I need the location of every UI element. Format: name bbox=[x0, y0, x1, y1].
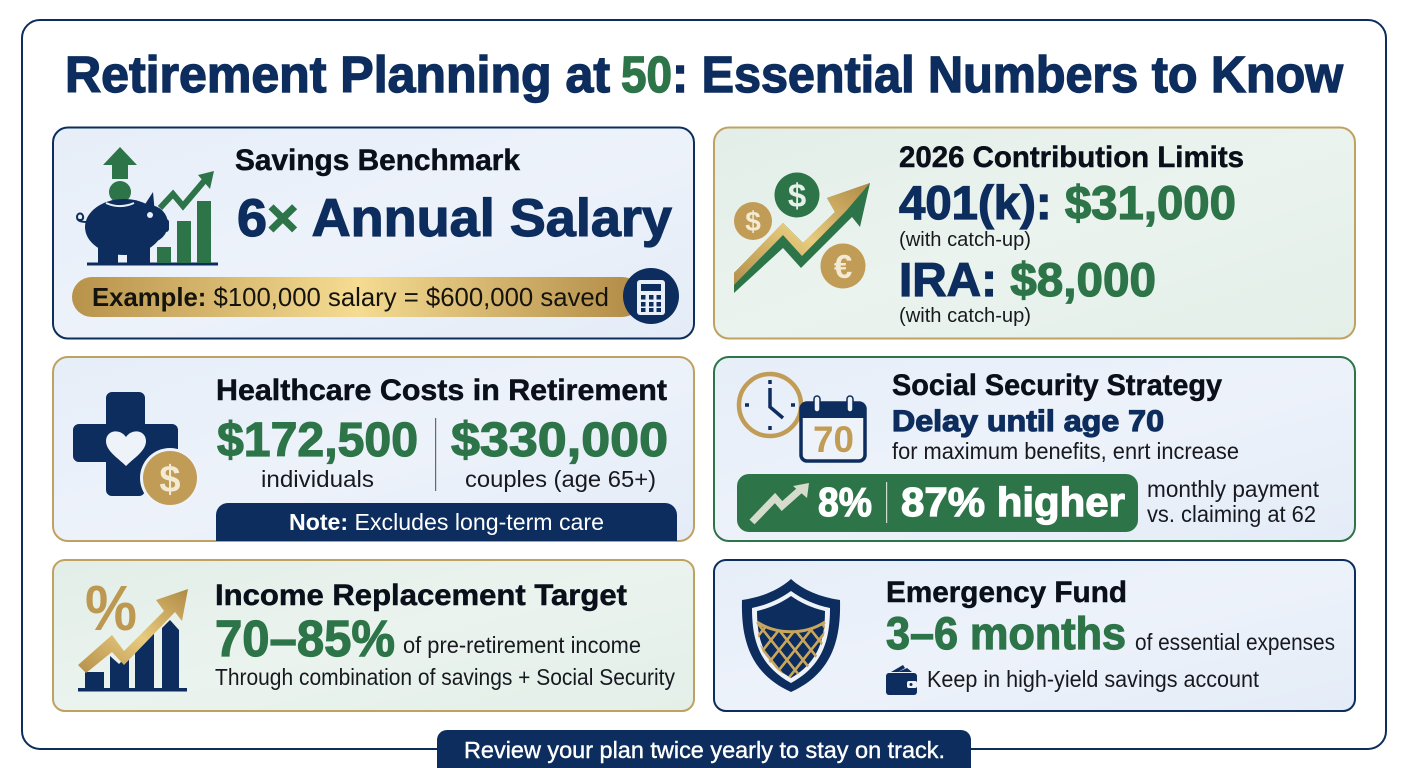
description: Through combination of savings + Social Security bbox=[215, 664, 675, 690]
note: (with catch-up) bbox=[899, 229, 1031, 251]
title: 50 bbox=[621, 46, 672, 103]
figure label: of pre-retirement income bbox=[403, 632, 641, 658]
key figure: 6× Annual Salary bbox=[237, 189, 673, 248]
green stat bar: 8% bbox=[818, 479, 872, 525]
couples figure: $330,000 bbox=[451, 414, 668, 467]
panel: healthcare costs bbox=[53, 357, 694, 541]
IRA limit: IRA: $8,000 bbox=[899, 253, 1156, 306]
heading: 2026 Contribution Limits bbox=[899, 141, 1244, 174]
heading: Income Replacement Target bbox=[215, 579, 627, 612]
icon: coins and rising arrow: $ bbox=[745, 206, 761, 237]
footer banner bbox=[437, 730, 971, 768]
note bar bbox=[216, 503, 677, 541]
note bar: Note: Excludes long-term care bbox=[289, 509, 604, 535]
401k limit: 401(k): $31,000 bbox=[899, 176, 1236, 229]
key message: Delay until age 70 bbox=[892, 405, 1164, 438]
storage tip: Keep in high-yield savings account bbox=[927, 666, 1260, 692]
icon: coins and rising arrow: € bbox=[834, 248, 852, 285]
title: : Essential Numbers to Know bbox=[672, 46, 1343, 103]
icon: percent with rising bars bbox=[78, 572, 188, 692]
icon: rising arrow bbox=[752, 490, 800, 522]
icon: calculator bbox=[623, 268, 679, 324]
individuals label: individuals bbox=[261, 466, 374, 492]
icon: medical cross with coin bbox=[73, 392, 200, 508]
figure label: of essential expenses bbox=[1135, 629, 1335, 655]
title: Retirement Planning at bbox=[65, 46, 610, 103]
icon: percent with rising bars: % bbox=[85, 572, 137, 644]
icon: clock and calendar: 70 bbox=[813, 419, 854, 460]
icon: shield with net bbox=[742, 579, 840, 692]
heading: Healthcare Costs in Retirement bbox=[216, 374, 667, 407]
comparison note: monthly payment bbox=[1147, 476, 1320, 502]
key figure: 70–85% bbox=[215, 610, 395, 667]
icon: clock and calendar bbox=[739, 374, 865, 461]
heading: Emergency Fund bbox=[886, 576, 1127, 609]
comparison note bbox=[1147, 476, 1320, 527]
panel: social security bbox=[714, 357, 1355, 541]
icon: wallet bbox=[886, 665, 917, 695]
couples label: couples (age 65+) bbox=[465, 466, 656, 492]
individuals figure: $172,500 bbox=[217, 414, 418, 467]
heading: Savings Benchmark bbox=[235, 144, 520, 177]
panel: income replacement bbox=[53, 560, 694, 711]
key figure: 3–6 months bbox=[886, 608, 1126, 659]
panel: savings benchmark bbox=[53, 128, 694, 338]
green stat bar bbox=[737, 474, 1138, 532]
divider bbox=[435, 418, 436, 491]
icon: coins and rising arrow bbox=[734, 172, 870, 293]
panel: contribution limits bbox=[714, 128, 1355, 338]
footer banner: Review your plan twice yearly to stay on track. bbox=[464, 737, 945, 763]
panel: emergency fund bbox=[714, 560, 1355, 711]
icon: piggy bank with growth chart bbox=[77, 147, 218, 266]
icon: medical cross with coin: $ bbox=[159, 459, 181, 501]
example pill bbox=[72, 277, 642, 317]
green stat bar: 87% higher bbox=[901, 479, 1125, 525]
heading: Social Security Strategy bbox=[892, 369, 1222, 402]
comparison note: vs. claiming at 62 bbox=[1147, 501, 1316, 527]
icon: coins and rising arrow: $ bbox=[788, 177, 806, 214]
description: for maximum benefits, enrt increase bbox=[892, 438, 1239, 464]
example pill: Example: $100,000 salary = $600,000 saved bbox=[92, 282, 609, 312]
note: (with catch-up) bbox=[899, 305, 1031, 327]
